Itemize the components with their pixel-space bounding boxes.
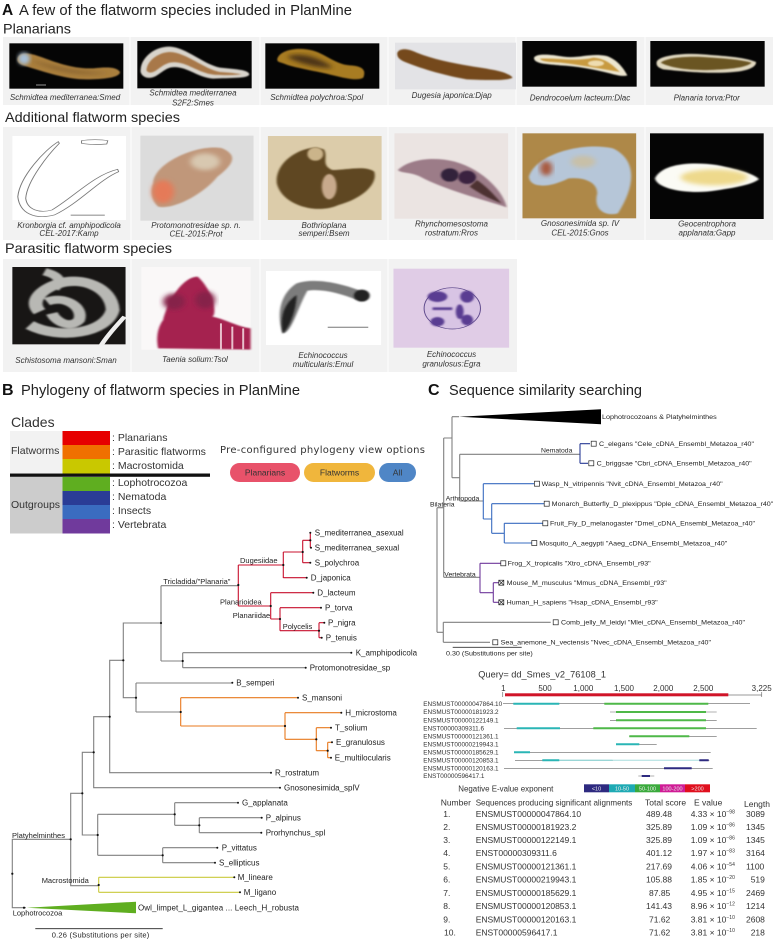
leaf labels: P_tenuis [326,634,357,642]
leaf labels: E_granulosus [336,738,385,747]
table rows: 3. [443,835,450,845]
leaf labels: S_mansoni [302,694,342,702]
e-value legend: <10 [592,786,601,792]
table header [441,798,770,809]
leaf labels: E_multilocularis [335,754,391,762]
collapsed clade triangle: Lophotrocozoa [27,902,136,913]
leaf labels: R_rostratum [275,768,319,778]
panel: additional flatworm species row [3,127,773,240]
caption: Protomonotresidae sp. n. [151,221,241,230]
panel: planarians row [3,37,773,108]
table rows: 217.69 [646,862,672,872]
tree branches: planarians clade [238,533,324,638]
scale bar: 0.26 (Substitutions per site) [52,930,150,939]
query axis: 2,000 [653,684,674,693]
table rows: 1345 [746,835,765,845]
clade labels: Platyhelminthes [12,831,65,840]
clade labels: Macrostomida [42,876,90,885]
scale bar: 0.30 (Substitutions per site) [446,651,533,658]
leaf labels: G_applanata [242,798,288,808]
table rows: −86 [726,822,735,828]
panel B heading: B [2,382,14,399]
caption: CEL-2015:Prot [170,230,223,238]
table rows: 401.12 [646,848,672,858]
internal nodes [11,539,329,909]
clade legend: : Insects [112,505,151,517]
panel C heading: Sequence similarity searching [449,383,642,399]
clade labels: Tricladida/"Planaria" [163,577,231,586]
heading: additional flatworm species: Additional flatworm species [5,109,180,125]
table rows: 10. [444,928,456,938]
drawing: Kronborgia [12,136,126,220]
table header: Length [744,799,770,809]
phylogeny view options [220,445,425,482]
query axis: 500 [538,684,552,693]
table rows: −86 [726,835,735,841]
clade labels: Polycelis [283,622,313,631]
clade legend: Outgroups [11,499,60,511]
table rows: −12 [726,902,735,908]
caption: rostratum:Rros [425,228,478,238]
table header: Sequences producing significant alignments [476,798,632,808]
leaf labels: S_polychroa [315,558,360,568]
leaf: Fruit fly: Fruit_Fly_D_melanogaster "Dmel_cDNA_Ensembl_Metazoa_r40" [550,521,756,528]
leaf: Human: Human_H_sapiens "Hsap_cDNA_Ensembl_r93" [507,600,658,607]
table rows: 6. [443,874,450,884]
photo: Schmidtea polychroa [265,43,379,89]
panel B: phylogeny [2,382,425,939]
leaf: Mosquito: Mosquito_A_aegypti "Aaeg_cDNA_Ensembl_Metazoa_r40" [539,540,728,547]
hit rows: ENSMUST00000121361.1 [423,734,499,740]
table rows: −20 [726,875,735,881]
leaf labels: M_lineare [238,873,273,882]
table rows: ENSMUST00000047864.10 [476,809,581,819]
button: all: All [393,468,402,478]
leaf: Sea anemone: Sea_anemone_N_vectensis "Nvec_cDNA_Ensembl_Metazoa_r40" [501,640,712,647]
photo: Bothrioplana [268,136,382,220]
e-value legend: 10-50 [615,786,629,792]
leaf: Wasp: Wasp_N_vitripennis "Nvit_cDNA_Ensembl_Metazoa_r40" [542,481,723,488]
table rows: 3.81 × 10 [691,928,726,938]
table rows: 2469 [746,888,765,898]
table rows: 325.89 [646,835,672,845]
caption: Gnosonesimida sp. IV [541,219,620,228]
table rows: 7. [443,888,450,898]
clade legend: : Parasitic flatworms [112,446,206,458]
photo: Geocentrophora [650,133,764,219]
leaf labels: D_japonica [311,574,351,582]
table header: Number [441,798,471,808]
caption: Taenia solium:Tsol [162,355,228,364]
hit rows: ENSMUST00000120163.1 [423,766,499,772]
caption: Bothrioplana [302,221,347,230]
table rows: −10 [726,915,735,921]
table rows: 141.43 [646,901,672,911]
table rows: 519 [751,874,765,884]
leaf: Frog: Frog_X_tropicalis "Xtro_cDNA_Ensembl_r93" [508,561,651,568]
table rows: 1100 [746,862,765,872]
clade labels [430,447,573,579]
button: flatworms: Flatworms [320,468,359,478]
photo: Taenia solium [141,267,251,350]
leaf: Mouse: Mouse_M_musculus "Mmus_cDNA_Ensembl_r93" [507,580,667,587]
table rows: ENSMUST00000219943.1 [476,874,577,884]
caption: multicularis:Emul [293,360,353,369]
leaf labels: S_mediterranea_sexual [315,544,399,552]
clade legend: : Planarians [112,432,167,444]
table rows: 87.85 [649,888,671,898]
photo: Schistosoma mansoni [12,267,126,345]
table rows: −10 [726,928,735,934]
caption: Echinococcus [427,350,476,359]
tree branches: macrostomida clade [99,877,240,892]
table rows: 3164 [746,848,765,858]
e-value legend [458,784,710,794]
photo: Schmidtea mediterranea Smes [137,41,252,88]
hit rows: ENSMUST00000047864.10 [423,701,503,708]
leaf labels: Prorhynchus_spl [266,828,326,838]
leaf labels: Gnosonesimida_splV [284,784,360,792]
table rows: 4. [443,848,450,858]
table rows: ENSMUST00000185629.1 [476,888,577,898]
hit rows: ENSMUST00000219943.1 [423,742,499,748]
caption: Dugesia japonica:Djap [412,91,492,100]
phylogeny view options: Pre-configured phylogeny view options [220,445,425,456]
photo: Planaria torva [650,41,765,87]
caption: Echinococcus [298,351,348,360]
table rows: 4.33 × 10 [691,809,726,819]
caption: Geocentrophora [678,220,736,228]
table rows: 4.95 × 10 [691,888,726,898]
leaf labels: S_mediterranea_asexual [315,528,404,538]
clade legend: : Macrostomida [112,460,184,472]
heading: parasitic flatworm species: Parasitic flatworm species [5,240,172,256]
leaf labels: P_alpinus [266,814,301,822]
tree branches: parasitic clade [181,698,341,758]
table header: Total score [645,798,686,808]
BLAST alignment graphic [423,670,772,794]
table rows: 1. [443,809,450,819]
table rows: 3089 [746,809,765,819]
leaf labels: P_vittatus [222,844,257,852]
hit rows [423,701,757,780]
clade labels [12,556,313,918]
hit rows: ENSMUST00000120853.1 [423,758,499,764]
caption: applanata:Gapp [679,228,736,238]
query axis: 1,000 [573,684,594,693]
leaf labels: H_microstoma [345,708,397,718]
scale bar [446,647,533,658]
table rows: 71.62 [649,928,671,938]
query axis: 1,500 [614,684,635,693]
caption: semperi:Bsem [298,229,350,238]
table rows: 1345 [746,822,765,832]
leaf labels: S_ellipticus [219,858,259,868]
leaf: Monarch butterfly: Monarch_Butterfly_D_plexippus "Dple_cDNA_Ensembl_Metazoa_r40" [552,501,774,508]
clade labels: Nematoda [541,447,573,454]
button: planarians [230,463,300,482]
table rows: 2608 [746,914,765,924]
photo: Echinococcus multilocularis [266,271,381,345]
tree branches [437,417,580,642]
table rows: 325.89 [646,822,672,832]
panel A heading: A few of the flatworm species included in PlanMine [19,2,352,19]
leaf labels: B_semperi [236,678,275,688]
e-value legend: 50-100 [639,786,656,792]
query axis: 3,225 [752,684,772,693]
photo: Protomonotresidae [140,136,254,221]
caption: CEL-2015:Gnos [551,228,609,238]
caption: CEL-2017:Kamp [39,229,99,238]
query axis [501,684,772,697]
photo: Echinococcus granulosus [393,269,509,348]
leaf: Comb jelly: Comb_jelly_M_leidyi "Mlei_cDNA_Ensembl_Metazoa_r40" [561,620,746,627]
hit rows: ENSMUST00000181923.2 [423,709,499,716]
clade legend: : Lophotrocozoa [112,477,187,489]
leaf labels: Owl_limpet_L_gigantea ... Leech_H_robusta [138,904,300,912]
panel C heading: C [428,382,440,399]
leaf labels: P_torva [325,604,353,612]
results table [441,798,770,938]
phylogenetic tree [11,528,418,939]
clade labels: Bilateria [430,501,455,508]
leaf labels: D_lacteum [317,588,356,598]
hit rows: ENST00000309311.6 [423,726,484,732]
query axis: 1 [501,684,506,693]
leaf labels: P_nigra [328,618,356,628]
table rows: 3.81 × 10 [691,914,726,924]
table rows: 1.09 × 10 [691,835,726,845]
table rows: ENSMUST00000120853.1 [476,901,577,911]
hit rows: ENST00000596417.1 [423,773,485,780]
tree branches: backbone [12,586,351,908]
table rows: 1.97 × 10 [691,848,726,858]
scale bar [35,929,163,939]
table rows: 489.48 [646,809,672,819]
hit rows: ENSMUST00000122149.1 [423,718,499,724]
table rows: 105.88 [646,874,672,884]
query title: Query= dd_Smes_v2_76108_1 [478,670,606,680]
photo: Dugesia japonica [395,43,516,89]
caption: Schmidtea mediterranea:Smed [10,93,121,102]
query axis: 2,500 [693,684,714,693]
table rows: 71.62 [649,914,671,924]
caption: Schistosoma mansoni:Sman [15,356,117,365]
collapsed clade triangle: Lophotrocozoans and Platyhelminthes: Lophotrocozoans & Platyhelminthes [602,414,717,421]
table rows: ENST00000596417.1 [476,928,558,938]
panel: parasitic flatworm species row [3,259,517,372]
caption: Schmidtea polychroa:Spol [270,93,363,102]
photo: Schmidtea mediterranea Smed [9,43,123,89]
panel C: sequence similarity searching [423,382,774,938]
caption: Dendrocoelum lacteum:Dlac [530,94,630,102]
similarity tree [430,409,774,658]
collapsed clade triangle: Lophotrocozoans and Platyhelminthes [459,409,717,424]
panel A heading: A [2,2,13,19]
e-value legend: >200 [691,786,704,792]
table rows: 9. [443,914,450,924]
leaf labels: K_amphipodicola [356,648,418,658]
photo: Dendrocoelum lacteum [522,41,637,87]
caption: granulosus:Egra [422,360,481,368]
e-value legend: 100-200 [662,786,683,792]
table rows: ENSMUST00000122149.1 [476,835,577,845]
table rows: 8.96 × 10 [691,901,726,911]
table rows: ENST00000309311.6 [476,848,557,858]
clade labels: Arthropoda [446,495,480,502]
clade legend: : Vertebrata [112,519,166,531]
clade labels: Dugesiidae [240,556,278,565]
caption: Rhynchomesostoma [415,220,489,228]
clade labels: Vertebrata [444,572,476,579]
table rows [443,809,765,938]
clade legend [10,414,210,534]
clade legend: Clades [11,414,55,430]
table rows: −98 [726,809,735,815]
photo: Gnosonesimida [522,133,636,218]
table rows: 5. [443,862,450,872]
clade legend: : Nematoda [112,491,166,503]
table rows: −54 [726,862,735,868]
clade labels: Planariidae [233,611,270,620]
caption: Planaria torva:Ptor [674,94,740,102]
table header: E value [694,798,723,808]
e-value legend: Negative E-value exponent [458,785,554,794]
table rows: ENSMUST00000121361.1 [476,862,577,872]
button: flatworms [304,463,375,482]
button: all [379,463,416,482]
table rows: ENSMUST00000181923.2 [476,822,577,832]
caption: Kronborgia cf. amphipodicola [17,221,121,230]
heading: planarians: Planarians [3,20,71,36]
table rows: −15 [726,889,735,895]
leaf labels: M_ligano [244,888,277,897]
leaf: C elegans: C_elegans "Cele_cDNA_Ensembl_Metazoa_r40" [599,441,755,448]
table rows: 1214 [746,901,765,911]
clade labels: Planarioidea [220,598,263,606]
table rows: ENSMUST00000120163.1 [476,914,577,924]
caption: Schmidtea mediterranea [149,88,237,98]
table rows: 1.09 × 10 [691,822,726,832]
clade labels: Lophotrocozoa [13,908,63,918]
caption: S2F2:Smes [172,98,214,108]
clade legend: Flatworms [11,445,59,457]
leaf labels [138,528,418,912]
leaf labels: T_solium [335,724,368,732]
hit rows: ENSMUST00000185629.1 [423,750,499,756]
leaf: C briggsae: C_briggsae "Cbri_cDNA_Ensembl_Metazoa_r40" [597,461,752,468]
panel B heading: Phylogeny of flatworm species in PlanMine [21,383,300,399]
panel A: flatworm species [2,2,773,372]
table rows: −83 [726,849,735,855]
table rows: 1.85 × 10 [691,874,726,884]
table rows: 218 [751,928,765,938]
table rows: 8. [443,901,450,911]
table rows: 4.06 × 10 [691,862,726,872]
photo: Rhynchomesostoma [394,133,508,219]
table rows: 2. [443,822,450,832]
button: planarians: Planarians [245,468,285,478]
leaf labels: Protomonotresidae_sp [310,664,391,672]
